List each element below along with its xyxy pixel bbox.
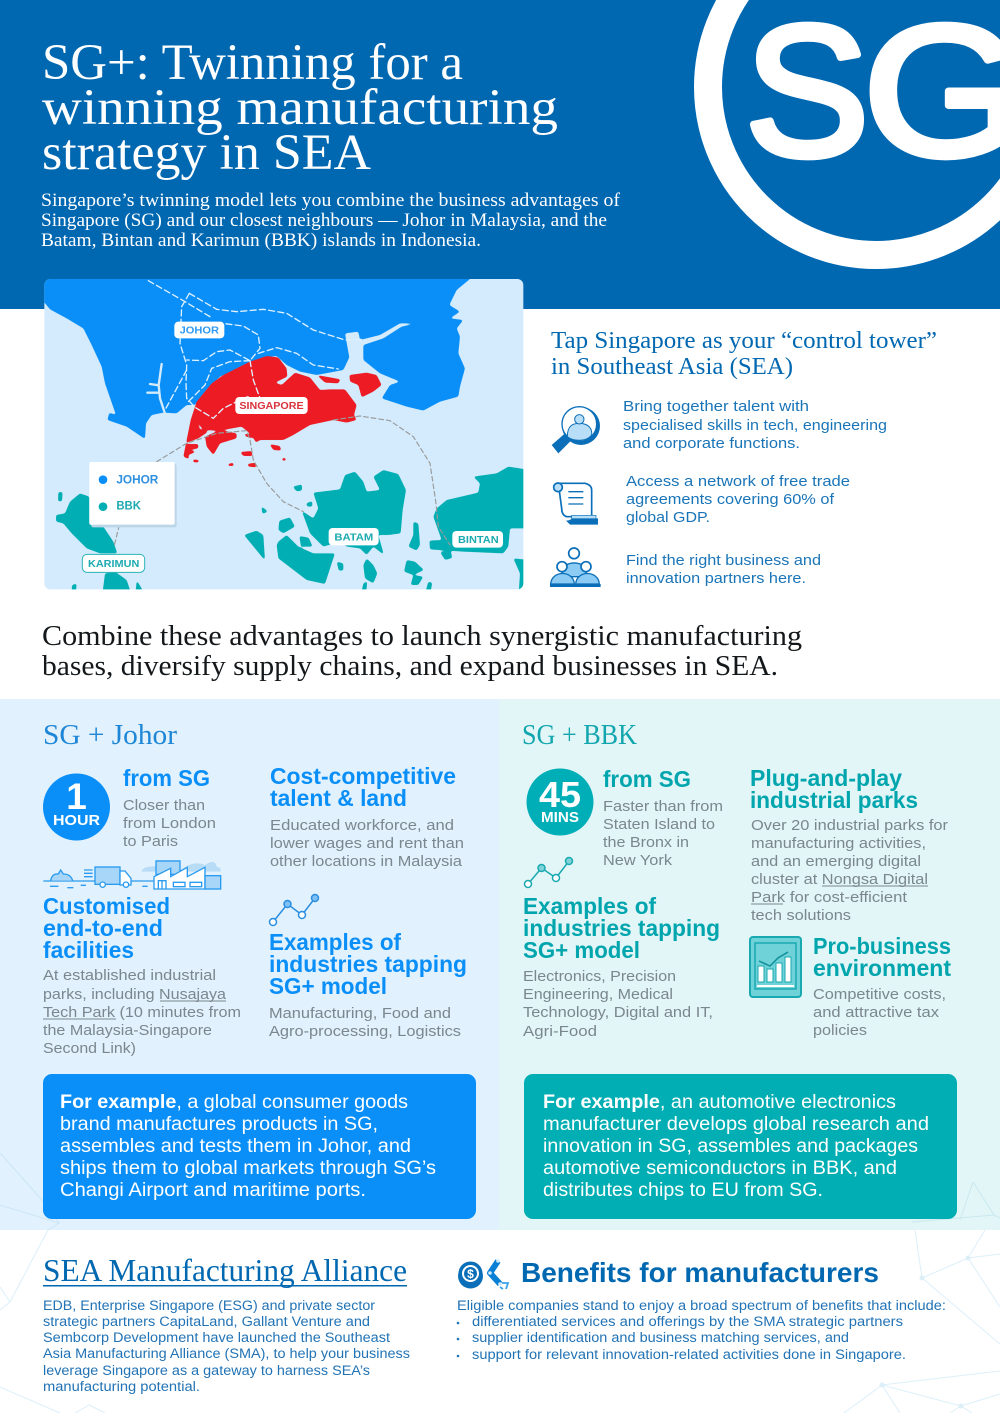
text: benefits list: Eligible companies stand to enjoy a broad spectrum of benefits that include: — [457, 1298, 946, 1313]
block: from SG: from SG — [123, 765, 210, 791]
text: free trade: agreements covering 60% of — [626, 491, 835, 508]
title: winning manufacturing — [42, 80, 558, 136]
title: SG+: Twinning for a — [42, 35, 463, 91]
badge: 45 mins — [526, 768, 594, 836]
callout: Johor example: brand manufactures products in SG, — [60, 1114, 378, 1135]
control tower section — [550, 327, 937, 587]
block: examples of industries: Manufacturing, Food and — [269, 1005, 451, 1022]
block: examples of industries: Agri-Food — [523, 1023, 597, 1040]
callout: BBK example: automotive semiconductors in BBK, and — [543, 1158, 897, 1179]
block: examples of industries: Examples of — [523, 893, 656, 919]
block: pro-business environment — [813, 933, 951, 1039]
block: from SG: from London — [123, 815, 216, 832]
block: from SG: from SG — [603, 766, 691, 792]
block: customised facilities: At established industrial — [43, 967, 216, 984]
decorative network — [0, 1153, 59, 1230]
combine statement: bases, diversify supply chains, and expand businesses in SEA. — [42, 651, 778, 682]
text: alliance description — [43, 1298, 410, 1394]
block: from SG — [123, 765, 216, 850]
decorative network — [912, 1182, 1000, 1222]
map label: Johor: JOHOR — [180, 326, 219, 337]
header banner — [0, 0, 1000, 309]
text: free trade: Access a network of free trade — [626, 473, 850, 490]
block: customised facilities: Tech Park (10 minutes from — [43, 1004, 241, 1021]
badge: 1 hour — [43, 774, 110, 840]
block: pro-business environment: Pro-business — [813, 933, 951, 959]
text: benefits list — [457, 1298, 946, 1362]
heading: benefits: Benefits for manufacturers — [521, 1257, 879, 1288]
block: SEA Manufacturing Alliance — [43, 1253, 410, 1394]
callout: BBK example: distributes chips to EU from SG. — [543, 1180, 823, 1201]
heading: SG + Johor: SG + Johor — [43, 719, 177, 751]
block: plug-and-play parks: tech solutions — [751, 907, 851, 924]
block: customised facilities — [43, 893, 241, 1057]
block: examples of industries: industries tapping — [269, 951, 467, 977]
callout: Johor example: Changi Airport and maritime ports. — [60, 1180, 366, 1201]
title: strategy in SEA — [42, 125, 371, 181]
block: from SG: to Paris — [123, 833, 178, 850]
map label: Batam — [329, 528, 379, 545]
block: from SG — [603, 766, 723, 869]
panel: SG + BBK — [499, 699, 1000, 1230]
title — [42, 35, 558, 181]
text: partners: innovation partners here. — [626, 570, 806, 587]
block: plug-and-play parks — [750, 765, 948, 924]
block: customised facilities: end-to-end — [43, 915, 163, 941]
text: partners: Find the right business and — [626, 552, 821, 569]
text: free trade — [626, 473, 850, 526]
map label: Karimun: KARIMUN — [88, 559, 139, 570]
block: examples of industries — [523, 893, 720, 1040]
block: customised facilities: the Malaysia-Singapore — [43, 1022, 212, 1039]
block: plug-and-play parks: and an emerging digital — [751, 853, 921, 870]
map label: Bintan — [452, 531, 503, 548]
panel: SG + Johor — [0, 699, 499, 1230]
text: alliance description: manufacturing potential. — [43, 1379, 200, 1394]
control tower heading — [551, 327, 937, 380]
block: cost-competitive talent: other locations in Malaysia — [270, 853, 463, 870]
map label: Karimun — [82, 554, 145, 572]
subtitle — [41, 191, 621, 251]
text: alliance description: leverage Singapore as a gateway to harness SEA’s — [43, 1363, 370, 1378]
icon: group of people — [550, 548, 601, 587]
block: plug-and-play parks: industrial parks — [750, 787, 918, 813]
block: plug-and-play parks: manufacturing activities, — [751, 835, 926, 852]
text: partners — [626, 552, 821, 587]
callout: Johor example — [43, 1074, 476, 1219]
text: alliance description: Sembcorp Development have launched the Southeast — [43, 1330, 390, 1345]
map region: Johor — [44, 279, 470, 438]
callout: BBK example: manufacturer develops global research and — [543, 1114, 929, 1135]
block: examples of industries: Examples of — [269, 929, 401, 955]
block: pro-business environment: Competitive costs, — [813, 986, 946, 1003]
text: alliance description: EDB, Enterprise Singapore (ESG) and private sector — [43, 1298, 376, 1313]
block: benefits for manufacturers — [457, 1257, 946, 1362]
text: talent: and corporate functions. — [623, 435, 800, 452]
icon: line chart — [524, 858, 572, 888]
block: examples of industries: Engineering, Medical — [523, 986, 673, 1003]
icon: scroll document — [554, 483, 598, 525]
block: plug-and-play parks: Over 20 industrial parks for — [751, 817, 948, 834]
block: customised facilities: Second Link) — [43, 1040, 136, 1057]
callout: Johor example: assembles and tests them in Johor, and — [60, 1136, 411, 1157]
map — [30, 270, 530, 600]
heading: SEA Manufacturing Alliance: SEA Manufacturing Alliance — [43, 1253, 407, 1288]
text: talent: Bring together talent with — [623, 398, 809, 415]
map label: Batam: BATAM — [334, 533, 373, 544]
text: benefits list: support for relevant innovation-related activities done in Singapore. — [472, 1347, 906, 1362]
heading: SG + BBK: SG + BBK — [522, 719, 637, 751]
block: from SG: Closer than — [123, 797, 205, 814]
illustration: factory logistics — [43, 860, 221, 889]
subtitle: Batam, Bintan and Karimun (BBK) islands in Indonesia. — [41, 231, 481, 251]
map legend: JOHOR — [116, 473, 159, 486]
block: pro-business environment: policies — [813, 1022, 867, 1039]
block: customised facilities: facilities — [43, 937, 134, 963]
block: cost-competitive talent: Educated workforce, and — [270, 817, 454, 834]
callout: Johor example: For example, a global consumer goods — [60, 1092, 408, 1113]
block: customised facilities: parks, including Nusajaya — [43, 986, 227, 1003]
map label: Johor — [174, 322, 224, 338]
text: free trade: global GDP. — [626, 509, 710, 526]
block: examples of industries: industries tapping — [523, 915, 720, 941]
block: cost-competitive talent: Cost-competitive — [270, 763, 456, 789]
text: talent: specialised skills in tech, engineering — [623, 417, 887, 434]
block: examples of industries: Electronics, Precision — [523, 968, 676, 985]
badge: 45 mins: 45 — [539, 774, 581, 815]
icon: growth chart board — [750, 937, 801, 997]
block: examples of industries — [269, 929, 467, 1040]
block: plug-and-play parks: Plug-and-play — [750, 765, 902, 791]
callout: BBK example — [524, 1074, 957, 1219]
badge: 1 hour: HOUR — [53, 812, 100, 829]
combine statement: Combine these advantages to launch synergistic manufacturing — [42, 621, 802, 652]
map label: Singapore — [235, 397, 308, 414]
icon: line chart — [270, 894, 318, 926]
text: talent — [623, 398, 887, 452]
block: plug-and-play parks: Park for cost-efficient — [751, 889, 908, 906]
map: dashed boundaries — [114, 281, 450, 547]
map region: Singapore — [183, 356, 382, 467]
icon: coin and robot arm — [458, 1259, 508, 1289]
callout: BBK example: For example , an automotive electronics — [543, 1092, 896, 1113]
block: examples of industries: SG+ model — [523, 937, 640, 963]
icon: magnifier with person — [552, 407, 600, 453]
block: examples of industries: Technology, Digital and IT, — [523, 1004, 713, 1021]
callout: BBK example: innovation in SG, assembles and packages — [543, 1136, 918, 1157]
block: from SG: New York — [603, 852, 673, 869]
text: benefits list: differentiated services and offerings by the SMA strategic partners — [472, 1314, 903, 1329]
block: cost-competitive talent — [270, 763, 464, 870]
block: pro-business environment: and attractive tax — [813, 1004, 940, 1021]
map: Johor river — [147, 364, 165, 413]
block: pro-business environment: environment — [813, 955, 951, 981]
block: from SG: Faster than from — [603, 798, 723, 815]
icon: coin and robot arm: $ — [467, 1267, 474, 1281]
control tower heading: Tap Singapore as your “control tower” — [551, 327, 937, 354]
map legend — [89, 462, 177, 527]
badge: 45 mins: MINS — [541, 809, 579, 826]
block: examples of industries: Agro-processing, Logistics — [269, 1023, 461, 1040]
map legend: BBK — [116, 500, 142, 513]
subtitle: Singapore’s twinning model lets you combine the business advantages of — [41, 191, 621, 211]
subtitle: Singapore (SG) and our closest neighbours — Johor in Malaysia, and the — [41, 211, 607, 231]
text: alliance description: Asia Manufacturing Alliance (SMA), to help your business — [43, 1346, 410, 1361]
combine statement — [42, 621, 802, 682]
block: cost-competitive talent: lower wages and rent than — [270, 835, 464, 852]
text: alliance description: strategic partners CapitaLand, Gallant Venture and — [43, 1314, 370, 1329]
logo: SG ring — [708, 0, 1000, 255]
block: customised facilities: Customised — [43, 893, 170, 919]
block: from SG: Staten Island to — [603, 816, 715, 833]
block: cost-competitive talent: talent & land — [270, 785, 407, 811]
text: benefits list: supplier identification and business matching services, and — [472, 1330, 849, 1345]
map region: BBK islands — [56, 467, 530, 600]
map label: Singapore: SINGAPORE — [239, 401, 304, 412]
control tower heading: in Southeast Asia (SEA) — [551, 353, 793, 380]
callout: Johor example: ships them to global markets through SG’s — [60, 1158, 436, 1179]
block: plug-and-play parks: cluster at Nongsa Digital — [751, 871, 928, 888]
badge: 1 hour: 1 — [66, 776, 87, 817]
block: from SG: the Bronx in — [603, 834, 689, 851]
block: examples of industries: SG+ model — [269, 973, 387, 999]
footer network pattern — [0, 1230, 1000, 1413]
map label: Bintan: BINTAN — [458, 535, 499, 546]
